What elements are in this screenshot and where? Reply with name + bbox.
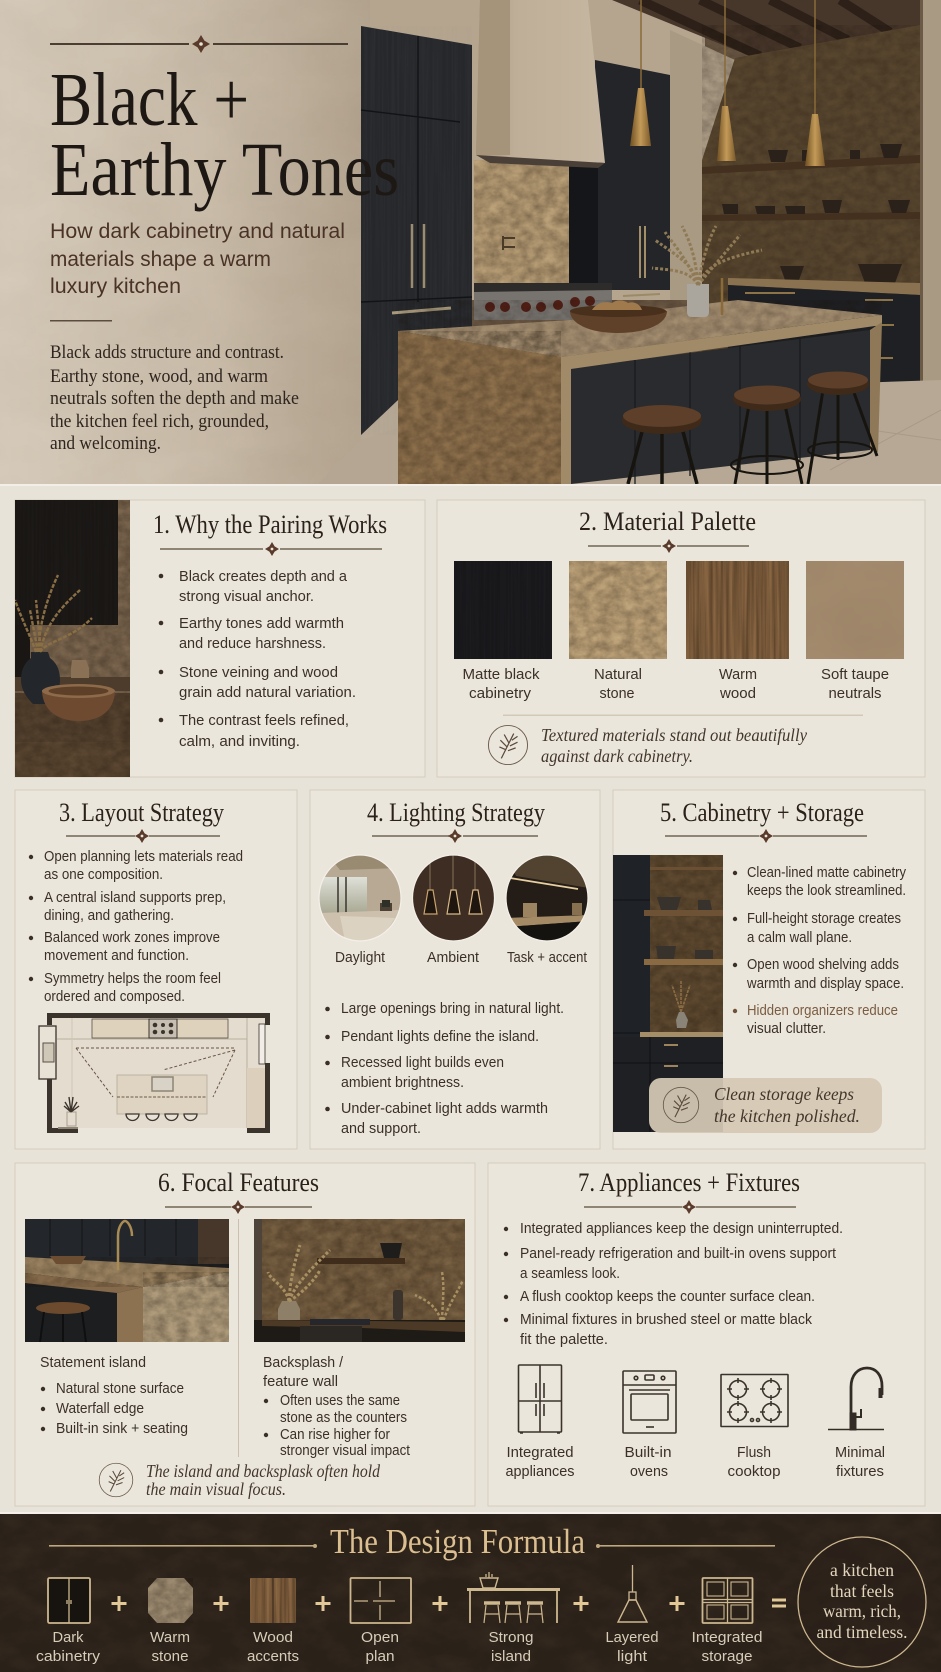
icon labels: Integrated [506,1445,574,1461]
hero photo: kitchen [0,0,941,484]
formula labels: storage [702,1648,752,1665]
bullet list: movement and function. [44,947,189,964]
icon: open plan [350,1578,411,1623]
list: statement island: Natural stone surface [56,1380,184,1397]
icon: dark cabinetry [48,1578,90,1623]
bullet list: Balanced work zones improve [44,929,220,946]
photo: ambient [412,855,495,941]
icon labels: Minimal [835,1445,885,1461]
hero subtitle [50,220,345,298]
sub-heading: backsplash: Backsplash / [263,1355,344,1371]
swatch labels: wood [719,686,756,702]
bullet list: A central island supports prep, [44,889,226,906]
bullet list: and reduce harshness. [179,635,326,652]
bullet list [733,864,906,1037]
ornament [665,829,867,843]
icon labels [506,1445,885,1480]
bullet list: Recessed light builds even [341,1054,504,1071]
icon: oven [623,1371,676,1433]
icon: cooktop [721,1374,788,1426]
formula labels: accents [247,1648,299,1665]
bullet list: keeps the look streamlined. [747,882,906,899]
ornament [584,1200,796,1214]
callout text: The island and backsplask often hold [146,1461,381,1481]
icon: refrigerator [518,1365,562,1433]
icon labels: Built-in [624,1445,672,1461]
panel 7: appliances and fixtures [488,1163,925,1506]
sub-heading: backsplash [263,1355,344,1390]
list: backsplash: Can rise higher for [280,1426,390,1443]
swatch: matte black [454,561,552,659]
panel 6: focal features [15,1163,475,1506]
bullet list: Pendant lights define the island. [341,1028,539,1045]
list: backsplash: stone as the counters [280,1409,407,1426]
callout text: Textured materials stand out beautifully [541,725,807,745]
bullet list: fit the palette. [520,1331,608,1348]
heading: 4. Lighting Strategy [367,798,545,827]
circle labels [335,950,587,966]
hero title: Black + [50,58,249,142]
bullet list: and support. [341,1120,421,1137]
ornament [66,829,220,843]
icon: strong island [467,1572,560,1623]
bullet list: ordered and composed. [44,988,185,1005]
photo: statement island [25,1219,229,1342]
swatch labels: stone [600,686,634,702]
bullet list: visual clutter. [747,1020,826,1037]
heading: 1. Why the Pairing Works [153,510,387,539]
bullet list: Under-cabinet light adds warmth [341,1100,548,1117]
icon labels: ovens [630,1464,668,1480]
bullet list: Integrated appliances keep the design uninterrupted. [520,1220,843,1237]
ornament [165,1200,312,1214]
hero short rule [50,320,112,322]
bullet list: Stone veining and wood [179,664,338,681]
formula labels: Open [361,1629,399,1646]
list: backsplash: stronger visual impact [280,1442,411,1459]
hero intro paragraph: and welcoming. [50,434,161,454]
list: statement island: Waterfall edge [56,1400,144,1417]
swatch: warm wood [686,561,789,659]
formula labels: Layered [606,1629,658,1646]
bullet list: ambient brightness. [341,1074,464,1091]
formula labels: Warm [150,1629,190,1646]
list: statement island [41,1380,188,1437]
hero intro paragraph: neutrals soften the depth and make [50,389,299,409]
icon: leaf [488,725,528,765]
bullet list: The contrast feels refined, [179,712,349,729]
bullet list [29,848,243,1005]
hero intro paragraph: the kitchen feel rich, grounded, [50,412,269,432]
callout text: against dark cabinetry. [541,746,693,766]
footer band: the design formula [0,1512,941,1672]
bullet list: Black creates depth and a [179,568,348,585]
formula labels [36,1629,762,1665]
formula labels: Wood [253,1629,293,1646]
sub-heading: statement island: Statement island [40,1355,146,1371]
swatch labels: neutrals [828,686,882,702]
callout text [714,1084,860,1126]
bullet list [325,1000,564,1137]
panel 4: lighting strategy [310,790,600,1149]
bullet list: Clean-lined matte cabinetry [747,864,906,881]
result circle: that feels [830,1581,894,1601]
bullet list: Open wood shelving adds [747,956,899,973]
list: statement island: Built-in sink + seating [56,1420,188,1437]
bullet list: Earthy tones add warmth [179,615,344,632]
floor plan [39,1013,270,1133]
result circle: and timeless. [816,1622,908,1642]
icon: layered light [618,1565,647,1622]
circle labels: Ambient [427,950,479,966]
heading: 3. Layout Strategy [59,798,224,827]
bullet list: Minimal fixtures in brushed steel or matte black [520,1311,812,1328]
formula labels: stone [152,1648,188,1665]
result circle: warm, rich, [823,1601,901,1621]
swatch labels [462,667,889,702]
hero subtitle: How dark cabinetry and natural [50,220,345,243]
hero subtitle: luxury kitchen [50,275,181,298]
formula labels: Integrated [692,1629,762,1646]
callout text [541,725,807,766]
bullet list [159,568,356,750]
hero title [50,58,399,212]
formula labels: Strong [488,1629,534,1646]
photo: backsplash [254,1219,465,1342]
ring outlines [319,855,588,941]
heading: 2. Material Palette [579,507,756,536]
icon: faucet [828,1368,884,1430]
swatch labels: Matte black [462,667,540,683]
icon: integrated storage [702,1578,752,1623]
bullet list: Full-height storage creates [747,910,901,927]
hero ornament divider [50,35,348,53]
icon: leaf [99,1463,133,1497]
bullet list: Large openings bring in natural light. [341,1000,564,1017]
hero intro paragraph [50,343,299,454]
formula labels: island [491,1648,531,1665]
bullet list: dining, and gathering. [44,907,174,924]
plus and equals signs [112,1596,786,1611]
result circle [798,1537,926,1667]
callout text [146,1461,381,1499]
icon: warm stone [148,1578,193,1623]
bullet list: Panel-ready refrigeration and built-in ovens support [520,1245,837,1262]
photo: task and accent [506,855,589,941]
callout text: the kitchen polished. [714,1106,860,1126]
icon labels: appliances [506,1464,574,1480]
hero intro paragraph: Earthy stone, wood, and warm [50,367,269,387]
circle labels: Task + accent [507,950,587,966]
ornament [160,542,382,556]
callout text: Clean storage keeps [714,1084,854,1104]
ornament [588,539,749,553]
callout: clean storage [649,1078,882,1133]
sub-heading: backsplash: feature wall [263,1374,338,1390]
icon labels: cooktop [728,1464,780,1480]
photo: shelving [613,855,723,1132]
bullet list: warmth and display space. [746,975,904,992]
panel 3: layout strategy [15,790,297,1149]
result circle: a kitchen [830,1560,894,1580]
bullet list: strong visual anchor. [179,588,314,605]
heading rules [49,1544,775,1548]
swatch labels: Warm [719,667,757,683]
swatch: soft taupe [806,561,904,659]
hero title: Earthy Tones [50,128,399,212]
hero intro paragraph: Black adds structure and contrast. [50,343,284,363]
circle labels: Daylight [335,950,385,966]
callout text: the main visual focus. [146,1479,286,1499]
bullet list: Open planning lets materials read [44,848,243,865]
hero band edge [0,484,941,486]
ornament [372,829,538,843]
swatch: natural stone [569,561,667,659]
heading: 5. Cabinetry + Storage [660,798,864,827]
bullet list: a calm wall plane. [747,929,852,946]
bullet list: as one composition. [44,866,163,883]
panel 2: material palette [437,500,925,777]
bullet list [504,1220,843,1348]
swatch labels: Soft taupe [821,667,889,683]
bullet list: A flush cooktop keeps the counter surface clean. [520,1288,815,1305]
bullet list: Hidden organizers reduce [747,1002,898,1019]
swatch labels: Natural [594,667,642,683]
list: backsplash: Often uses the same [280,1392,400,1409]
heading: 6. Focal Features [158,1168,319,1197]
bullet list: a seamless look. [520,1265,620,1282]
icon labels: Flush [737,1445,771,1461]
bullet list: grain add natural variation. [179,684,356,701]
bullet list: Symmetry helps the room feel [44,970,221,987]
photo: daylight [319,855,401,941]
swatch labels: cabinetry [469,686,532,702]
heading: 7. Appliances + Fixtures [578,1168,800,1197]
panel 1: why the pairing works [15,500,425,777]
bullet list: calm, and inviting. [179,733,300,750]
icon: leaf [663,1087,699,1123]
footer heading: The Design Formula [330,1522,585,1561]
formula labels: cabinetry [36,1648,101,1665]
formula labels: plan [366,1648,394,1665]
icon labels: fixtures [836,1464,884,1480]
list: backsplash [264,1392,411,1459]
formula labels: Dark [52,1629,84,1646]
formula labels: light [617,1648,648,1665]
panel 5: cabinetry and storage [613,790,925,1149]
icon: wood accents [250,1578,296,1623]
hero subtitle: materials shape a warm [50,248,271,271]
photo: vase and bowl [15,500,130,777]
